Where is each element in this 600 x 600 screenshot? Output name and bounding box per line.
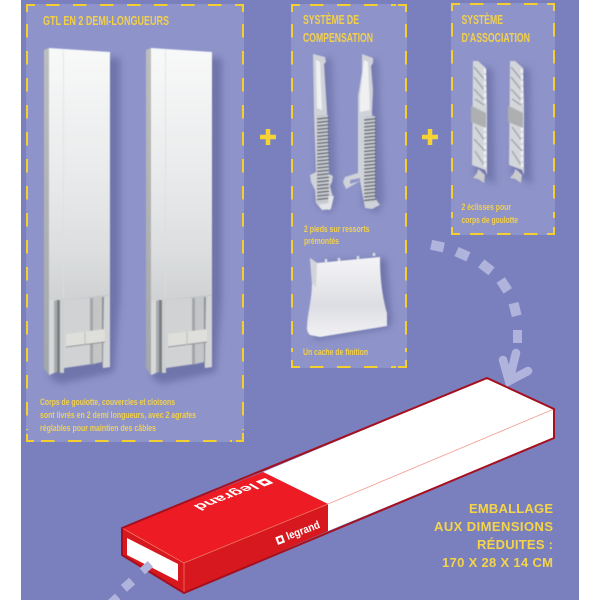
arrow: dashes leaving the box opening [108, 561, 153, 600]
box red sleeve [122, 472, 328, 593]
text: panel description: réglables pour maintien des câbles [40, 423, 156, 434]
logo: legrand on the front of the box: legrand [285, 519, 322, 543]
text: spring feet caption: prémontés [304, 236, 339, 247]
product: first splice plate [471, 61, 495, 185]
heading: GTL en 2 demi-longueurs: GTL EN 2 DEMI-LONGUEURS [43, 14, 169, 28]
text: splice plates caption [462, 202, 518, 226]
arrow: dashed curve down to the box [430, 240, 528, 381]
text: reduced package dimensions: RÉDUITES : [477, 537, 553, 552]
text: panel description: Corps de goulotte, couvercles et cloisons [40, 397, 175, 408]
text: finishing cover caption: Un cache de finition [303, 347, 368, 358]
heading: système d'association: SYSTÈME [462, 12, 503, 27]
panel: GTL en 2 demi-longueurs [26, 4, 244, 442]
box white faces [263, 378, 554, 531]
panel: système d'association [451, 3, 555, 235]
icon: plus between first and second panels [260, 129, 276, 145]
text: reduced package dimensions: 170 X 28 X 14 CM [442, 555, 553, 570]
heading: système d'association [462, 12, 530, 45]
product: second spring foot [343, 54, 384, 214]
product: first half-length duct [44, 48, 120, 384]
box outline [122, 378, 554, 593]
product: finishing cover [307, 253, 392, 340]
product: second half-length duct [146, 48, 222, 384]
text: panel description [40, 397, 196, 434]
logo: legrand on the front of the box [275, 519, 322, 547]
heading: système de compensation [303, 12, 373, 45]
text: reduced package dimensions: AUX DIMENSIONS [434, 519, 553, 534]
heading: système d'association: D'ASSOCIATION [462, 31, 530, 45]
logo: legrand on top of the box [190, 476, 276, 513]
product: first spring foot [310, 54, 337, 214]
text: spring feet caption: 2 pieds sur ressorts [304, 224, 370, 235]
text: splice plates caption: corps de goulotte [462, 215, 518, 226]
product: second splice plate [508, 61, 532, 185]
text: splice plates caption: 2 éclisses pour [462, 202, 511, 213]
text: reduced package dimensions [434, 501, 553, 570]
panel: système de compensation [291, 4, 407, 368]
text: spring feet caption [304, 224, 370, 247]
heading: système de compensation: SYSTÈME DE [303, 12, 359, 27]
heading: système de compensation: COMPENSATION [303, 31, 373, 45]
text: panel description: sont livrés en 2 demi longueurs, avec 2 agrafes [40, 410, 196, 421]
product: legrand packaging box [122, 378, 554, 593]
logo: legrand on top of the box: legrand [190, 481, 263, 513]
text: reduced package dimensions: EMBALLAGE [469, 501, 553, 516]
icon: plus between second and third panels [422, 129, 438, 145]
